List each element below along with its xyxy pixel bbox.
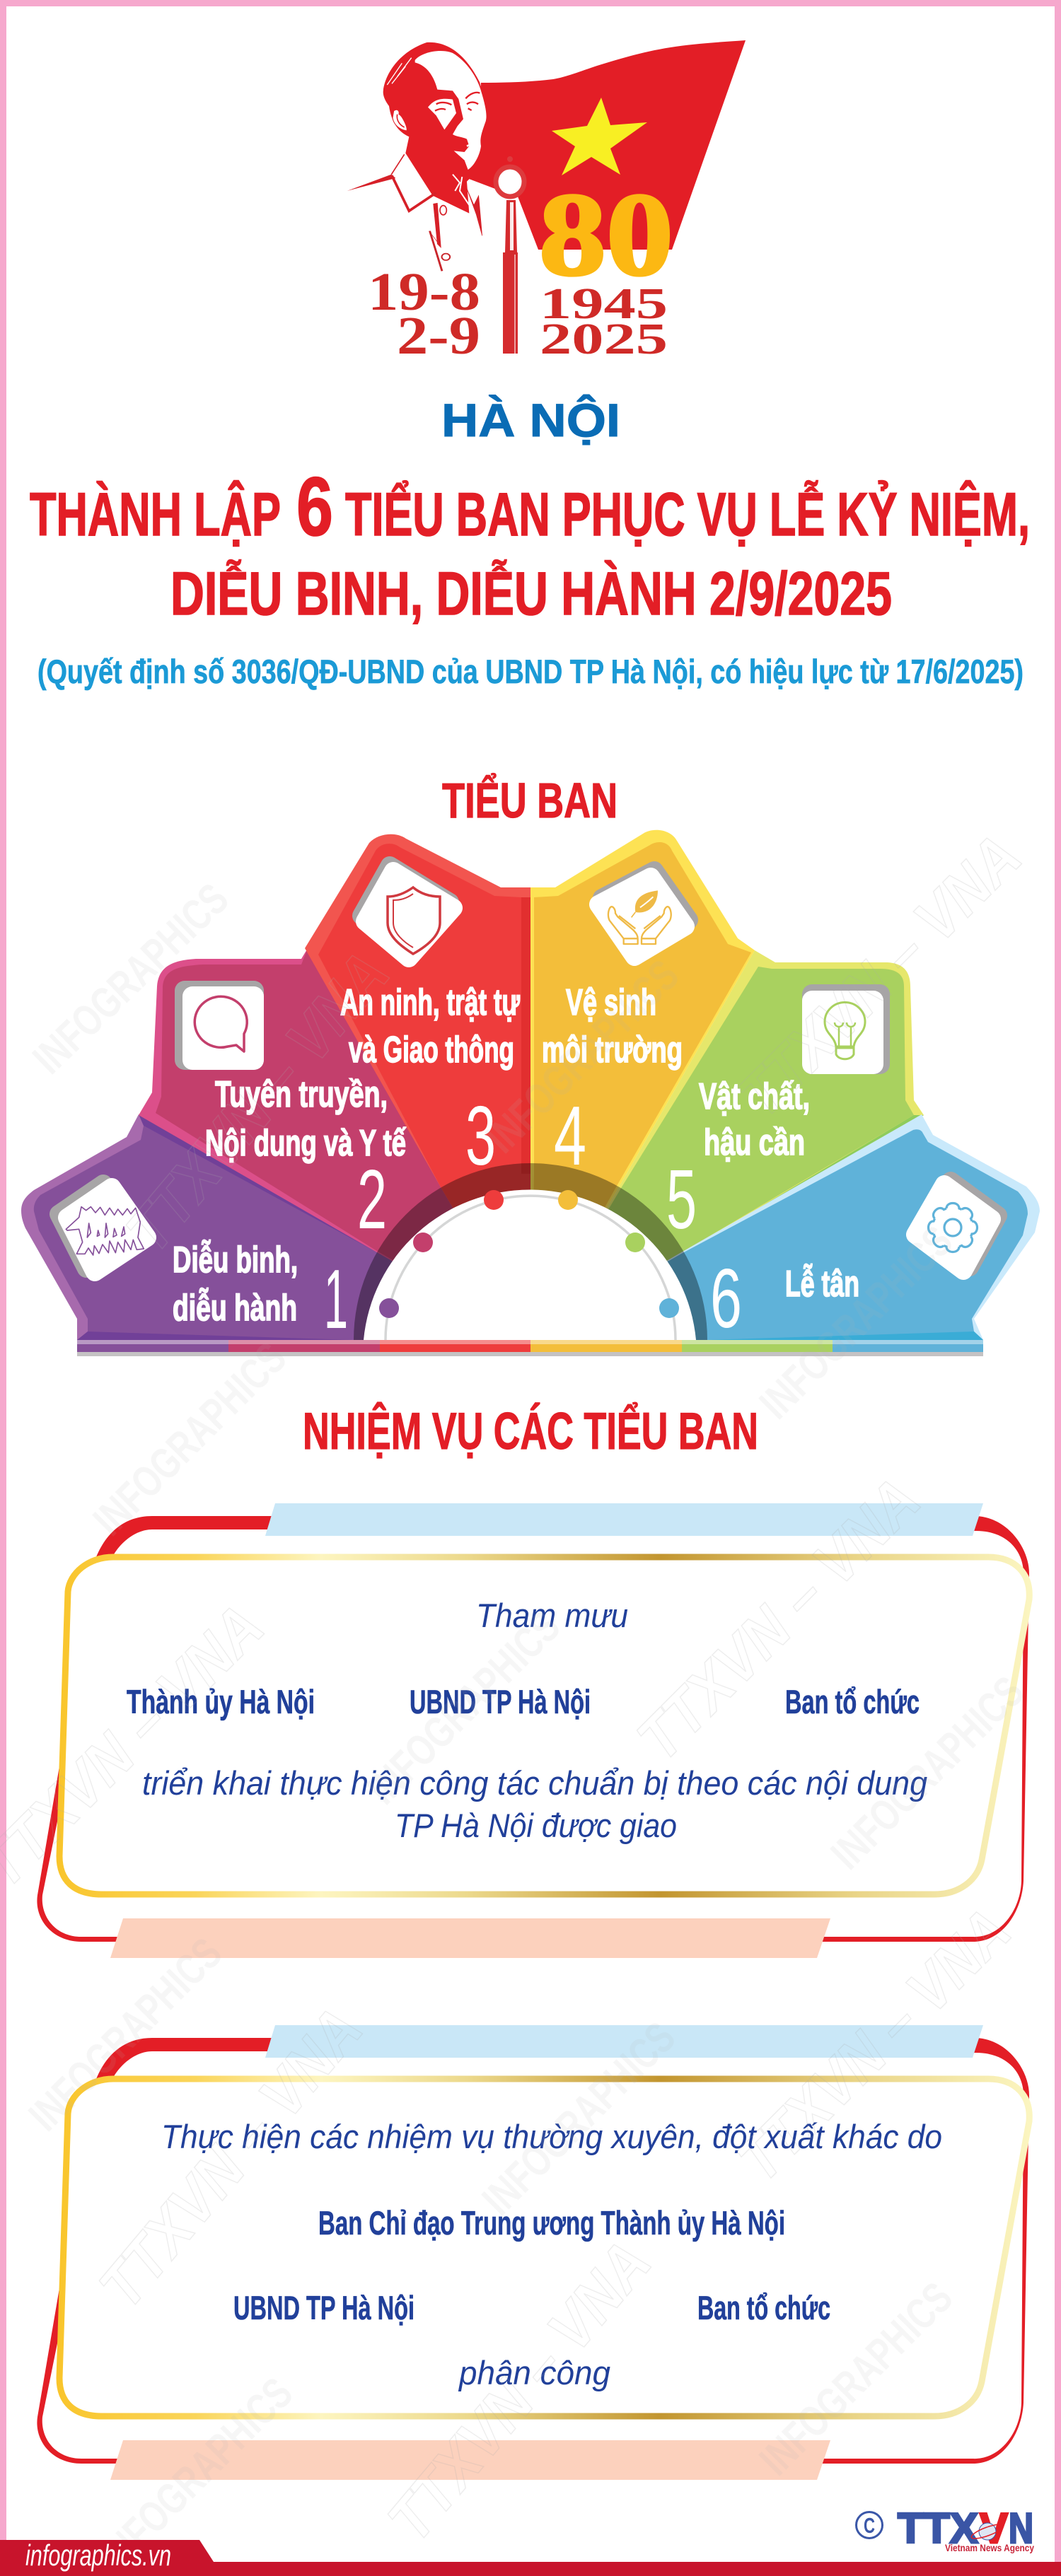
central dial (354, 1163, 707, 1340)
logo: 80 years national day (347, 40, 746, 366)
labels: subcommittee 2: 2 (357, 1153, 387, 1247)
labels: subcommittee 5 (666, 1076, 810, 1247)
labels: subcommittee 4: 4 (554, 1089, 586, 1183)
heading: tasks: NHIỆM VỤ CÁC TIỂU BAN (303, 1403, 758, 1460)
red outline (37, 2038, 1029, 2464)
labels: subcommittee 6: 6 (710, 1252, 742, 1346)
watermarks: TTXVN – VNA (724, 821, 1034, 1130)
icon: gear (915, 1181, 998, 1271)
watermarks: INFOGRAPHICS (473, 2013, 685, 2225)
logo: TTXVN: TTX (898, 2505, 978, 2552)
text: task description (142, 1764, 927, 1844)
labels: subcommittee 1: 1 (324, 1252, 348, 1346)
number 80: 80 (539, 169, 673, 301)
text: UBND TP Hà Nội: UBND TP Hà Nội (233, 2289, 414, 2326)
labels: subcommittee 2: Nội dung và Y tế (205, 1123, 406, 1164)
text: UBND TP Hà Nội: UBND TP Hà Nội (410, 1683, 591, 1720)
segment 1: purple (21, 1114, 530, 1340)
main title (30, 460, 1030, 628)
panel: task 1 (37, 1503, 1029, 1958)
icon: marching people (59, 1184, 147, 1272)
watermarks: INFOGRAPHICS (477, 951, 688, 1162)
icon: speech bubble (175, 981, 264, 1070)
labels: subcommittee 3: An ninh, trật tự (340, 982, 520, 1023)
watermarks: TTXVN – VNA (112, 938, 402, 1265)
text: Tham mưu: Tham mưu (476, 1597, 628, 1634)
microphone (496, 156, 524, 354)
date 19-8: 19-8 (368, 262, 480, 322)
fan diagram (21, 830, 1040, 1356)
copyright mark: C (864, 2513, 875, 2538)
heading: Tiểu ban: TIỂU BAN (442, 772, 618, 828)
star (552, 98, 647, 175)
text: steering committee: Ban Chỉ đạo Trung ương Thành ủy Hà Nội (318, 2204, 785, 2242)
logo: TTXVN: Vietnam News Agency (945, 2542, 1034, 2553)
labels: subcommittee 5: hậu cần (704, 1122, 805, 1163)
year 1945: 1945 (540, 280, 668, 328)
portrait lower coat (430, 231, 450, 271)
labels: subcommittee 5: 5 (666, 1153, 697, 1247)
labels: subcommittee 2 (205, 1074, 406, 1247)
peach band (110, 1918, 830, 1958)
watermarks: TTXVN – VNA (86, 1994, 376, 2321)
blue band (265, 2025, 983, 2058)
labels: subcommittee 6: Lễ tân (785, 1264, 859, 1305)
labels: subcommittee 6 (710, 1252, 859, 1346)
labels: subcommittee 4 (542, 982, 683, 1183)
watermarks: TTXVN – VNA (724, 1895, 1024, 2194)
footer bar (0, 2539, 1061, 2576)
blue band (265, 1503, 983, 1536)
labels: subcommittee 1: Diễu binh, (173, 1240, 298, 1281)
watermarks (0, 821, 1034, 2576)
labels: subcommittee 3: 3 (465, 1089, 496, 1183)
heading: Hà Nội: HÀ NỘI (441, 394, 620, 446)
text: task description: TP Hà Nội được giao (395, 1807, 677, 1844)
website: infographics.vn (25, 2539, 171, 2572)
peach band (110, 2440, 830, 2480)
copyright mark (856, 2512, 883, 2539)
flag (469, 40, 746, 250)
text: phân công: phân công (458, 2354, 610, 2391)
labels: subcommittee 3: và Giao thông (349, 1030, 514, 1071)
icon: shield (361, 866, 453, 958)
segment 5: green (530, 950, 924, 1340)
year 2025: 2025 (540, 315, 668, 363)
main title: THÀNH LẬP (30, 481, 281, 549)
watermarks: TTXVN – VNA (374, 2227, 664, 2554)
labels: subcommittee 2: Tuyên truyền, (215, 1074, 388, 1115)
gold frame (59, 1557, 1029, 1894)
text: Ban tổ chức: Ban tổ chức (697, 2289, 830, 2326)
labels: subcommittee 4: Vệ sinh (566, 982, 656, 1023)
watermarks: INFOGRAPHICS (358, 1602, 569, 1814)
watermarks: INFOGRAPHICS (750, 1217, 962, 1428)
base stripe (77, 1340, 983, 1356)
watermarks: INFOGRAPHICS (91, 2369, 302, 2576)
segment 4: orange (530, 830, 755, 1340)
watermarks: TTXVN – VNA (623, 1464, 933, 1773)
text: Thành ủy Hà Nội: Thành ủy Hà Nội (127, 1683, 315, 1720)
main title: 6 (296, 460, 333, 554)
logo: TTXVN: N (1009, 2505, 1033, 2552)
text: task description: triển khai thực hiện công tác chuẩn bị theo các nội dung (142, 1764, 927, 1802)
logo: TTXVN: V (980, 2505, 1008, 2552)
labels: subcommittee 1 (173, 1240, 348, 1346)
labels: subcommittee 3 (340, 982, 520, 1183)
logo: TTXVN (856, 2505, 1034, 2553)
portrait (347, 42, 487, 247)
date 2-9: 2-9 (397, 306, 480, 366)
watermarks: INFOGRAPHICS (84, 1334, 296, 1545)
gold frame (59, 2079, 1029, 2416)
watermarks: INFOGRAPHICS (750, 2273, 962, 2485)
red outline (37, 1516, 1029, 1942)
labels: subcommittee 5: Vật chất, (699, 1076, 810, 1117)
icon: light bulb (802, 984, 890, 1074)
watermarks: INFOGRAPHICS (24, 875, 238, 1083)
panel: task 2 (37, 2025, 1029, 2480)
segment 2: magenta (139, 948, 530, 1340)
labels: subcommittee 4: môi trường (542, 1030, 683, 1071)
segment 6: blue (530, 1114, 1040, 1340)
watermarks: INFOGRAPHICS (20, 1929, 231, 2140)
text: Ban tổ chức: Ban tổ chức (785, 1683, 920, 1720)
icon: hands and leaf (598, 870, 689, 957)
text: regular and urgent tasks: Thực hiện các nhiệm vụ thường xuyên, đột xuất khác do (161, 2118, 942, 2155)
segment 3: red (305, 834, 531, 1340)
labels: subcommittee 1: diễu hành (173, 1288, 297, 1329)
